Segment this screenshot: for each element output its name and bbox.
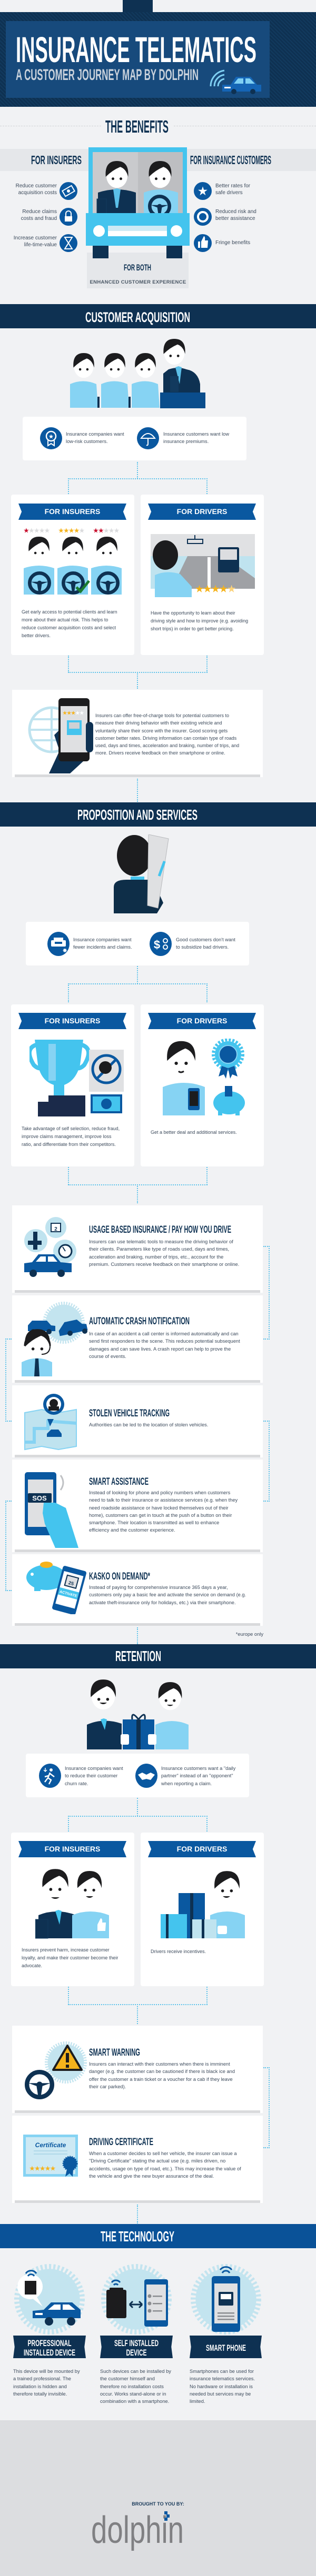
service: driving certificate: "Driving Certificate" stating the actual use (e.g. miles driven, no	[89, 2158, 225, 2164]
service: smart warning: offer the customer a train ticket or a voucher for a cab if they leave	[89, 2077, 233, 2082]
service: usage based insurance	[12, 1205, 263, 1293]
connector	[137, 2205, 138, 2223]
panel: proposition for insurers: ratio, and differentiate from their competitors.	[22, 1142, 116, 1147]
panel: proposition for drivers	[141, 1004, 264, 1166]
service: driving certificate: When a customer decides to sell her vehicle, the insurer can issue a	[89, 2151, 237, 2156]
column: self installed device	[100, 2264, 173, 2404]
icon: warning sign with steering wheel	[23, 2041, 88, 2105]
section band: proposition and services	[0, 802, 316, 827]
icon: car with hidden device	[13, 2262, 87, 2336]
column: smart phone: No hardware or installation is	[190, 2384, 253, 2389]
column: self installed device: occur. Works stand-alone or in	[100, 2391, 166, 2397]
box: retention needs: to reduce their customer	[65, 1773, 117, 1778]
column: smart phone: Smartphones can be used for	[190, 2369, 254, 2374]
service: automatic crash notification: course of events.	[89, 1354, 126, 1359]
panel: acquisition for insurers: more about their actual risk. This helps to	[22, 617, 108, 622]
footer: brought to you by dolphin	[0, 2420, 316, 2576]
list: customer benefits: Reduced risk and	[215, 209, 256, 215]
box: proposition needs: Insurance companies want	[73, 937, 132, 942]
panel: acquisition for drivers: Have the opportunity to learn about their	[151, 610, 235, 616]
box: acquisition needs: insurance premiums.	[163, 439, 209, 444]
icon: award: ★	[49, 434, 54, 440]
column: professional installed device	[13, 2264, 86, 2397]
icon: certificate	[23, 2135, 80, 2180]
connector	[137, 1627, 138, 1644]
box: acquisition needs: Insurance companies want	[66, 431, 124, 437]
connector: merge to tools box	[68, 656, 208, 689]
section band: retention: RETENTION	[115, 1648, 161, 1664]
panel: acquisition for insurers: Get early access to potential clients and learn	[22, 609, 117, 615]
panel: retention for drivers: Drivers receive incentives.	[151, 1949, 206, 1954]
column: professional installed device: therefore totally invisible.	[13, 2391, 67, 2397]
box: retention needs	[26, 1754, 249, 1797]
service: smart warning	[12, 2026, 263, 2113]
box: acquisition needs: Insurance customers want low	[163, 431, 229, 437]
section band: retention	[0, 1644, 316, 1668]
box: proposition needs: fewer incidents and claims.	[73, 944, 132, 950]
list: insurer benefits: Reduce customer	[16, 183, 57, 189]
text: for both: FOR BOTH	[124, 263, 151, 273]
box: free-of-charge tools: used, days and times, acceleration and braking, number of trips, and	[95, 743, 239, 748]
section band: proposition and services: PROPOSITION AND SERVICES	[77, 807, 197, 823]
list: customer benefits: Better rates for	[215, 183, 250, 189]
icon: car with road, calendar, speedometer	[24, 1217, 76, 1277]
service: usage based insurance: premium. Customers receive feedback on their smartphone or online.	[89, 1262, 239, 1267]
service: smart assistance: need to talk to their insurance or assistance services (e.g. when they	[89, 1497, 238, 1503]
service: automatic crash notification	[12, 1295, 263, 1383]
illustration: happy driver with rosette and piggy bank	[163, 1039, 245, 1115]
service: driving certificate: accidents, usage on type of road, etc.). This may increase the value of	[89, 2166, 241, 2171]
list: customer benefits: ★	[198, 186, 208, 197]
connector: merge to services	[68, 1167, 208, 1203]
icon: exit runner	[39, 1764, 61, 1788]
footer: brought to you by dolphin: BROUGHT TO YOU BY:	[132, 2501, 184, 2507]
illustration: insurer giving gift to customer	[87, 1679, 189, 1749]
list: customer benefits: better assistance	[215, 216, 255, 222]
illustration: trophy, no-fraud, money	[29, 1040, 124, 1116]
column: self installed device: Such devices can be installed by	[100, 2369, 171, 2374]
box: free-of-charge tools: customer better rates. Driving information can contain type of roads	[95, 736, 236, 741]
ribbon title	[100, 2336, 173, 2358]
box: acquisition needs	[23, 417, 246, 460]
box: retention needs: Insurance companies want	[65, 1766, 123, 1771]
connector: zigzag dotted line along services	[5, 1246, 270, 1591]
service: smart warning: Insurers can interact with their customers when there is imminent	[89, 2061, 230, 2067]
ribbon title	[13, 2336, 86, 2358]
box: proposition needs: to subsidize bad drivers.	[176, 944, 229, 950]
connector: side dotted line	[263, 2067, 271, 2149]
service: usage based insurance: their clients. Parameters like type of roads used, days and times,	[89, 1246, 229, 1252]
icon: crashed car: ✸	[62, 948, 67, 954]
column: smart phone: insurance telematics services.	[190, 2376, 255, 2381]
panel: acquisition for insurers: FOR INSURERS	[45, 507, 100, 516]
panel: retention for drivers	[141, 1833, 264, 1986]
icon: crashed car	[47, 932, 70, 956]
illustration: car with insurer and driver	[86, 147, 190, 288]
icon: SOS phone: SOS	[32, 1494, 47, 1502]
list: customer benefits: Fringe benefits	[215, 240, 250, 246]
box: free-of-charge tools: more. Drivers receive feedback on their smartphone or online.	[95, 750, 225, 756]
icon: certificate: Certificate	[35, 2141, 66, 2149]
service: smart assistance	[12, 1460, 263, 1552]
panel: retention for insurers: loyalty, and make their customer become their	[22, 1955, 118, 1960]
illustration: customers queuing at insurer desk	[70, 339, 205, 408]
box: proposition needs	[26, 922, 249, 965]
list: insurer benefits	[14, 182, 77, 252]
list: insurer benefits: Increase customer	[14, 235, 57, 241]
service: smart assistance: Instead of looking for phone and policy numbers when customers	[89, 1490, 230, 1495]
column: professional installed device: installation is hidden and	[13, 2384, 67, 2389]
service: smart assistance: need roadside assistance or have locked themselves out of their	[89, 1505, 229, 1511]
column: professional installed device: a trained professional. The	[13, 2376, 71, 2381]
panel: acquisition for drivers: driving style and how to improve (e.g. avoiding	[151, 618, 248, 623]
panel: benefits	[0, 147, 316, 288]
illustration: rated drivers: ★★★★★	[58, 528, 84, 534]
service: stolen vehicle tracking	[12, 1385, 263, 1457]
box: free-of-charge tools: Insurers can offer free-of-charge tools for potential customers to	[95, 713, 229, 718]
section band: customer acquisition: CUSTOMER ACQUISITION	[85, 309, 190, 325]
icon: dollar scissors	[150, 932, 172, 956]
icon: globe and phone: ★★★★★	[63, 710, 84, 716]
service: stolen vehicle tracking: Authorities can be led to the location of stolen vehicles.	[89, 1422, 208, 1427]
illustration: rated drivers	[24, 528, 122, 595]
ribbon title: DEVICE	[126, 2348, 146, 2358]
icon: map with pin	[24, 1394, 77, 1450]
service: smart warning: their car parked).	[89, 2084, 126, 2089]
icon: car with road, calendar, speedometer: 2	[54, 1226, 57, 1232]
heading: for insurers / for insurance customers: FOR INSURERS	[31, 153, 82, 167]
column: professional installed device: This device will be mounted by	[13, 2369, 80, 2374]
box: proposition needs: Good customers don't want	[176, 937, 235, 942]
panel: retention for drivers: FOR DRIVERS	[177, 1845, 227, 1853]
section band: the technology	[0, 2224, 316, 2248]
connector: acquisition tree	[68, 462, 208, 494]
icon: umbrella	[137, 427, 159, 449]
column: self installed device: the customer himself and	[100, 2376, 155, 2381]
heading: for insurers / for insurance customers	[31, 153, 271, 167]
illustration: person reading policy	[114, 834, 169, 913]
icon: certificate: ★★★★★	[29, 2166, 55, 2172]
service: driving certificate	[12, 2116, 263, 2203]
footnote: europe only: *europe only	[236, 1632, 263, 1637]
service: smart warning: danger (e.g. the customer can be cautioned if there is black ice and	[89, 2069, 235, 2074]
box: retention needs: churn rate.	[65, 1781, 88, 1786]
illustration: driver on road with score: ★★★★★	[195, 584, 236, 594]
title	[16, 29, 256, 84]
connector	[137, 779, 138, 802]
list: customer benefits: safe drivers	[215, 190, 243, 196]
service: driving certificate: the vehicle and give the new buyer assurance of the deal.	[89, 2174, 214, 2179]
list: customer benefits	[194, 182, 256, 252]
panel: proposition for insurers: FOR INSURERS	[45, 1017, 100, 1025]
list: insurer benefits: costs and fraud	[21, 216, 57, 222]
panel: acquisition for drivers	[141, 495, 264, 655]
box: free-of-charge tools: voluntarily share their score with the insurer. Good scoring gets	[95, 728, 228, 733]
panel: proposition for insurers	[11, 1004, 134, 1166]
column: smart phone: needed but services may be	[190, 2391, 251, 2397]
connector: retention tree	[68, 1798, 208, 1832]
panel: proposition for insurers: improve claims management, improve loss	[22, 1134, 112, 1139]
box: free-of-charge tools: measure their driving behavior with their existing vehicle and	[95, 720, 222, 726]
header: title banner	[0, 0, 316, 107]
connector: merge to retention services	[68, 1987, 208, 2025]
service: smart assistance: efficiency and the customer experience.	[89, 1527, 175, 1533]
illustration: driver with gifts	[160, 1867, 246, 1940]
panel: proposition for drivers: Get a better deal and additional services.	[151, 1130, 237, 1135]
icon: connected car	[210, 69, 261, 94]
panel: acquisition for insurers	[11, 495, 134, 655]
panel: retention for insurers: FOR INSURERS	[45, 1845, 100, 1853]
panel: acquisition for insurers: better drivers.	[22, 633, 51, 638]
icon: dongle and phone	[100, 2262, 174, 2336]
icon: SOS phone	[25, 1472, 78, 1548]
column: smart phone: limited.	[190, 2399, 205, 2404]
ribbon title	[190, 2336, 262, 2358]
service: smart assistance: smartphone. Their location is transmitted as well to enhance	[89, 1520, 219, 1525]
section band: the technology: THE TECHNOLOGY	[101, 2228, 174, 2245]
service: kasko on demand: customers only pay a basic fee and activate the service on demand (e.g.	[89, 1592, 246, 1597]
section band: customer acquisition	[0, 304, 316, 328]
icon: call center agent with crashed cars	[22, 1302, 87, 1376]
icon: dollar scissors: $	[154, 938, 160, 951]
box: retention needs: when reporting a claim.	[161, 1781, 212, 1786]
column: self installed device: combination with a smartphone.	[100, 2399, 169, 2404]
column: self installed device: therefore no installation costs	[100, 2384, 164, 2389]
panel: proposition for drivers: FOR DRIVERS	[177, 1017, 227, 1025]
icon: globe and phone	[28, 698, 93, 773]
panel: retention for insurers: Insurers prevent harm, increase customer	[22, 1947, 110, 1953]
service: automatic crash notification: send first responders to the scene. This reduces potential subsequent	[89, 1339, 240, 1344]
illustration: rated drivers: ★★★★★	[24, 528, 50, 534]
panel: acquisition for drivers: short trips) in order to get better pricing.	[151, 626, 234, 631]
icon: piggy bank with activate phone: ACTIVATE	[59, 1590, 77, 1598]
list: insurer benefits: life-time-value	[24, 242, 57, 248]
illustration: driver on road with score	[151, 534, 255, 597]
box: free-of-charge tools	[12, 690, 263, 777]
service: kasko on demand	[12, 1554, 263, 1626]
panel: proposition for insurers: Take advantage of self selection, reduce fraud,	[22, 1126, 120, 1131]
list: insurer benefits: acquisition costs	[18, 190, 57, 196]
service: usage based insurance: Insurers can use telematic tools to measure the driving behavior of	[89, 1239, 233, 1244]
icon: handshake	[135, 1764, 157, 1788]
service: usage based insurance: acceleration and braking, number of trips, etc., account for the	[89, 1254, 223, 1260]
service: automatic crash notification: In case of an accident a call center is informed automatically and can	[89, 1331, 239, 1336]
panel: acquisition for drivers: FOR DRIVERS	[177, 507, 227, 516]
illustration: insurer and loyal customer	[35, 1869, 109, 1938]
icon: smartphone	[190, 2262, 263, 2336]
box: retention needs: Insurance customers want a "daily	[161, 1766, 235, 1771]
service: smart assistance: home), customers can get in touch at the push of a button on their	[89, 1513, 232, 1518]
list: insurer benefits: Reduce claims	[22, 209, 57, 215]
icon: piggy bank with activate phone	[26, 1562, 86, 1614]
panel: retention for insurers	[11, 1833, 134, 1986]
service: automatic crash notification: damages and can save lives. A crash report can help to prove the	[89, 1346, 231, 1352]
panel: acquisition for insurers: reduce customer acquisition costs and select	[22, 625, 116, 630]
box: retention needs: partner" instead of an "opponent"	[161, 1773, 233, 1778]
illustration: car with insurer and driver: ENHANCED CUSTOMER EXPERIENCE	[90, 279, 186, 285]
icon: award	[40, 427, 62, 449]
panel: retention for insurers: advocate.	[22, 1963, 42, 1968]
box: acquisition needs: low-risk customers.	[66, 439, 108, 444]
illustration: rated drivers: ★★★★★	[93, 528, 119, 534]
service: kasko on demand: activate theft-insurance only for holidays, etc.) via their smartphone.	[89, 1600, 236, 1605]
column: smart phone	[190, 2264, 262, 2404]
connector: proposition tree	[68, 966, 208, 1002]
service: kasko on demand: Instead of paying for comprehensive insurance 365 days a year,	[89, 1585, 228, 1590]
icon: piggy bank with activate phone: 25	[68, 1580, 74, 1586]
